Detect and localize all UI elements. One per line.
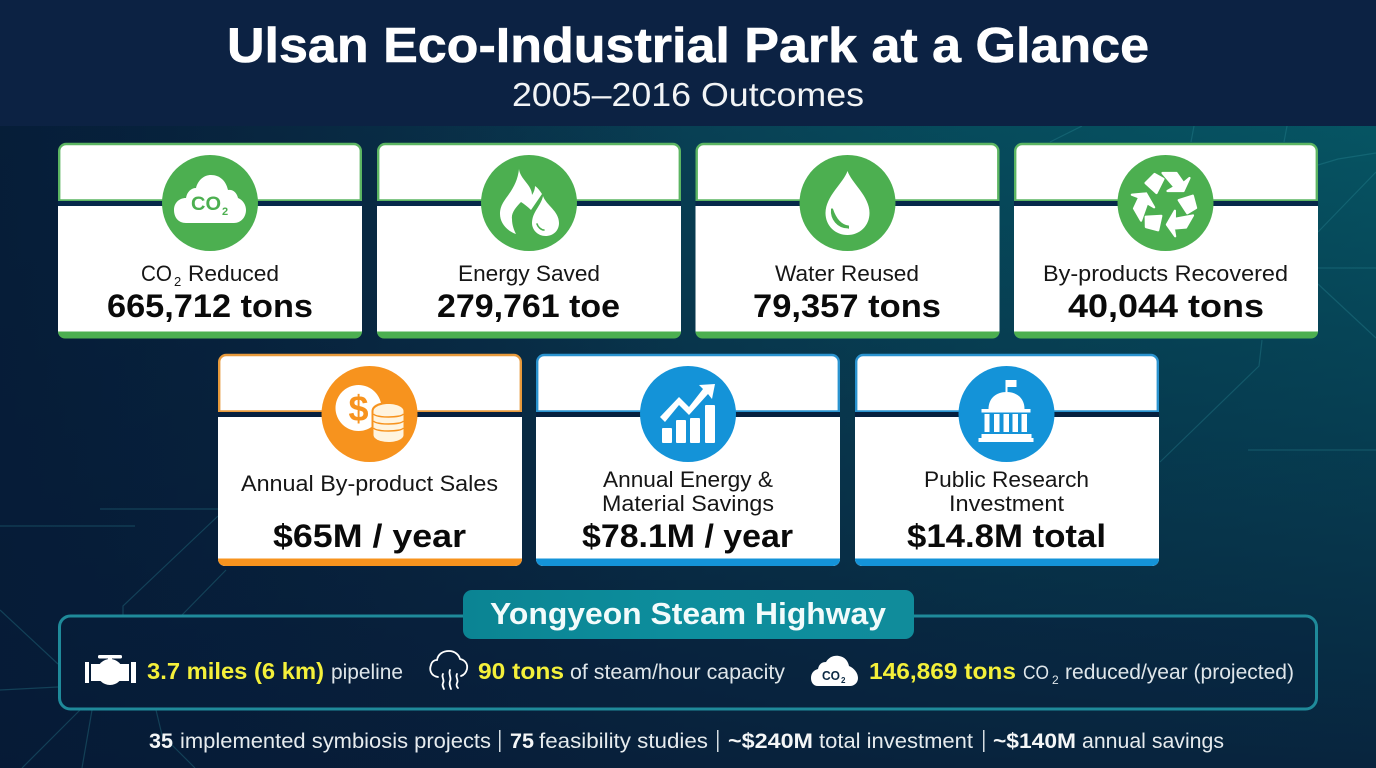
label: Reduced xyxy=(188,261,279,286)
summary line: total investment xyxy=(819,729,973,753)
heading pill xyxy=(463,590,914,639)
summary line: implemented symbiosis projects xyxy=(180,729,491,753)
summary line: 75 xyxy=(510,729,534,753)
label: 2 xyxy=(174,274,181,289)
value: 665,712 tons xyxy=(107,288,313,324)
stat: pipeline xyxy=(147,658,403,684)
label: By-products Recovered xyxy=(1043,261,1288,286)
icon: pipe valve xyxy=(85,655,136,685)
stat: steam capacity: of steam/hour capacity xyxy=(570,661,785,684)
label: CO xyxy=(141,261,172,286)
icon: recycling arrows xyxy=(1118,155,1214,251)
label xyxy=(602,467,774,516)
value: $78.1M / year xyxy=(582,518,793,554)
heading pill: Yongyeon Steam Highway xyxy=(490,596,887,631)
value: $14.8M total xyxy=(907,518,1106,554)
stat: pipeline: 3.7 miles (6 km) xyxy=(147,658,324,684)
stat: steam capacity xyxy=(478,658,785,684)
summary line: ~$240M xyxy=(728,729,813,753)
stat: CO2 reduced per year: reduced/year (projected) xyxy=(1065,661,1294,684)
icon: steam cloud xyxy=(430,651,467,689)
label: Annual By-product Sales xyxy=(241,471,498,496)
icon: CO2 cloud xyxy=(811,656,858,686)
card: energy saved xyxy=(377,144,681,338)
card: public research investment xyxy=(855,355,1159,566)
icon: water drop xyxy=(800,155,896,251)
label: Annual Energy & xyxy=(603,467,773,492)
label: Investment xyxy=(949,491,1064,516)
stat: steam capacity: 90 tons xyxy=(478,658,564,684)
value: $65M / year xyxy=(273,518,466,554)
card: annual energy and material savings xyxy=(536,355,840,566)
icon: CO2 cloud: 2 xyxy=(222,206,228,218)
summary line: annual savings xyxy=(1082,729,1224,753)
header band xyxy=(0,0,1376,126)
subtitle: 2005–2016 Outcomes xyxy=(512,76,864,113)
label: Energy Saved xyxy=(458,261,600,286)
stat: pipeline: pipeline xyxy=(331,661,403,684)
stat: CO2 reduced per year xyxy=(869,658,1294,687)
icon: growth chart xyxy=(640,366,736,462)
icon: CO2 cloud: 2 xyxy=(841,676,846,685)
card: by-products recovered xyxy=(1014,144,1318,338)
label xyxy=(924,467,1089,516)
summary line: feasibility studies xyxy=(539,729,708,753)
panel: Yongyeon Steam Highway xyxy=(60,590,1316,709)
value: 279,761 toe xyxy=(437,288,620,324)
icon: flame and drop xyxy=(481,155,577,251)
label: Water Reused xyxy=(775,261,919,286)
stat: CO2 reduced per year: CO xyxy=(1023,663,1049,684)
value: 79,357 tons xyxy=(753,288,941,324)
value: 40,044 tons xyxy=(1068,288,1264,324)
icon: CO2 cloud: CO xyxy=(822,668,840,683)
summary line: 35 xyxy=(149,729,173,753)
icon: CO2 cloud: CO xyxy=(191,194,221,215)
card: water reused xyxy=(696,144,1000,338)
summary line: ~$140M xyxy=(993,729,1076,753)
title: Ulsan Eco-Industrial Park at a Glance xyxy=(227,19,1149,73)
card: CO2 reduced xyxy=(58,144,362,338)
icon: CO2 cloud xyxy=(162,155,258,251)
icon: government building xyxy=(958,366,1054,462)
icon: dollar and coins: $ xyxy=(348,388,369,429)
summary line xyxy=(149,729,1224,753)
label xyxy=(141,261,279,289)
icon: dollar and coins xyxy=(322,366,418,462)
label: Public Research xyxy=(924,467,1089,492)
label: Material Savings xyxy=(602,491,774,516)
stat: CO2 reduced per year: 2 xyxy=(1052,673,1059,687)
stat: CO2 reduced per year: 146,869 tons xyxy=(869,658,1016,684)
card: annual by-product sales xyxy=(218,355,522,566)
